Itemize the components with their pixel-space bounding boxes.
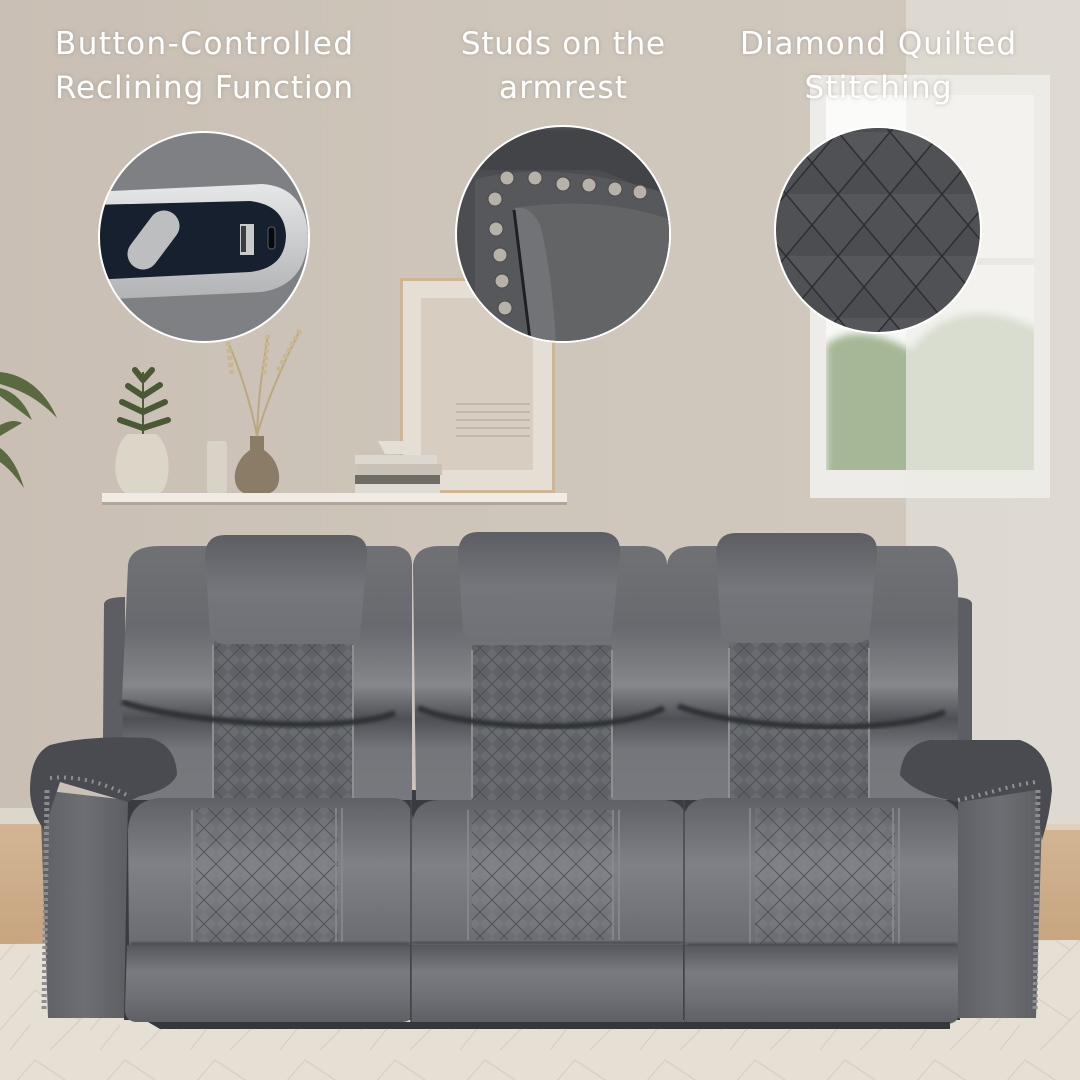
sheer curtain	[906, 0, 1080, 830]
headrests	[205, 532, 877, 644]
detail circle: control button	[90, 130, 315, 345]
seat cushions	[128, 798, 964, 945]
window	[810, 75, 1050, 498]
background: room wall	[0, 0, 1080, 830]
plant in white pot	[115, 370, 169, 493]
sofa body backing	[124, 790, 960, 1020]
quilted seat panels	[192, 808, 899, 944]
small candle	[207, 441, 227, 493]
houseplant at left edge	[0, 372, 57, 488]
right arm	[900, 740, 1052, 1018]
baseboard	[0, 808, 130, 824]
left arm	[30, 737, 177, 1018]
detail circle: diamond quilting	[770, 125, 985, 340]
shelf	[102, 493, 567, 505]
back cushion creases	[122, 702, 945, 727]
vase with dried stems	[228, 330, 300, 493]
heading: diamond quilted: Stitching	[804, 70, 952, 106]
sofa base	[148, 1022, 950, 1029]
heading: diamond quilted: Diamond Quilted	[740, 26, 1016, 62]
rear side panels	[103, 597, 972, 745]
heading: reclining function: Reclining Function	[55, 70, 353, 106]
heading: studs: armrest	[499, 70, 627, 106]
quilted back panels	[213, 640, 869, 800]
sofa	[30, 532, 1052, 1029]
detail circle: armrest studs	[455, 125, 671, 343]
patterned rug	[0, 940, 1080, 1080]
heading: reclining function: Button-Controlled	[55, 26, 353, 62]
heading: studs: Studs on the	[461, 26, 665, 62]
lower front panels	[125, 800, 960, 1024]
back cushions	[122, 546, 958, 800]
wooden floor	[0, 824, 1080, 949]
framed art	[400, 278, 555, 493]
stacked books and bowl	[355, 441, 442, 493]
